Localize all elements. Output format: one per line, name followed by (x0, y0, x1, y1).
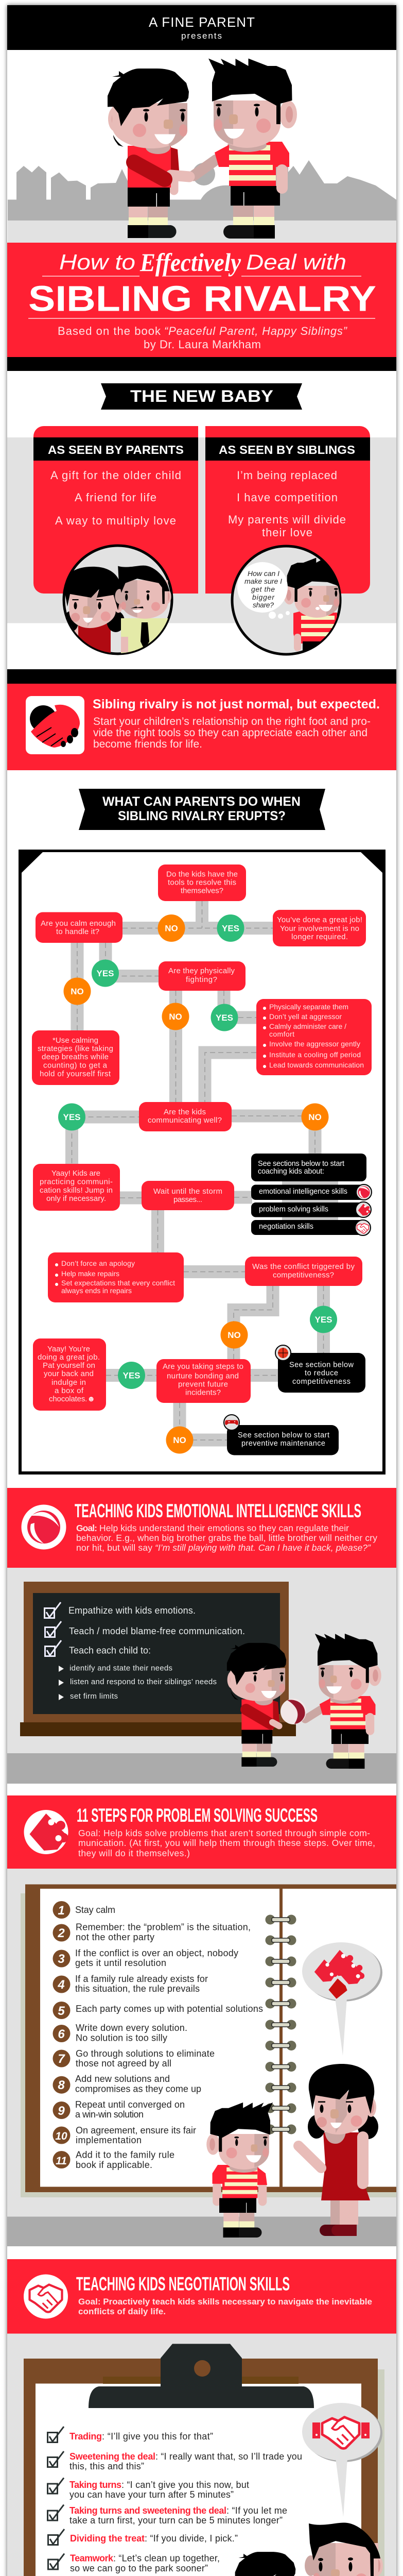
outcome: box of chocolates: your back and (44, 1369, 94, 1378)
section header: emotional intelligence: nor hit, but will say (76, 1543, 152, 1553)
title line one: Effectively (139, 248, 241, 277)
question: communicating well (148, 1108, 222, 1125)
question: nurture bonding (163, 1362, 243, 1397)
step list: implementation (76, 2135, 142, 2145)
negotiation list: Teamwork (70, 2553, 114, 2564)
question: do the kids have the tools (166, 870, 238, 895)
step list: Stay calm (75, 1905, 115, 1915)
step list: No solution is too silly (76, 2033, 167, 2043)
notebook: 11 (56, 2155, 67, 2167)
advice: calming strategies: counting) to get a (43, 1061, 108, 1070)
panel: key message (7, 684, 396, 770)
step list: a win-win solution (75, 2109, 144, 2120)
notebook: 8 (58, 2078, 65, 2092)
step list: not the other party (76, 1932, 154, 1942)
banner: the new baby (101, 383, 302, 410)
thought bubble: bigger (252, 593, 275, 601)
panel: as seen by siblings: My parents will divide (228, 513, 346, 526)
flowchart decision boxes (32, 865, 372, 1411)
notebook: 5 (58, 2004, 65, 2018)
thought bubble: How can I (248, 569, 279, 578)
title line one (59, 248, 346, 277)
advice: calming strategies: hold of yourself first (40, 1070, 111, 1078)
question: are you calm enough (41, 919, 116, 936)
step list: Remember: the “problem” is the situation, (76, 1922, 251, 1932)
notebook: 6 (58, 2027, 65, 2041)
panel: key message: vide the right tools so they can appreciate each other and (93, 727, 367, 739)
panel: key message: Start your children’s relationship on the right foot and pro- (93, 716, 371, 727)
flowchart coaching boxes: coaching kids about: (258, 1167, 324, 1176)
negotiation list: : “If you let me (226, 2505, 287, 2516)
question: competitiveness: Was the conflict triggered by (252, 1262, 355, 1271)
title panel (7, 243, 396, 357)
question: communicating well: communicating well? (148, 1116, 222, 1125)
flowchart yes and no badges: NO (165, 923, 178, 934)
checklist (68, 1605, 245, 1701)
negotiation list (69, 2431, 302, 2576)
section header: negotiation (7, 2259, 396, 2334)
panel: as seen by siblings: AS SEEN BY SIBLINGS (219, 443, 355, 456)
message text: Sibling rivalry is not just normal, but expected. (93, 697, 380, 711)
icon: handshake (24, 2274, 68, 2318)
question: competitiveness: competitiveness? (273, 1270, 334, 1280)
flowchart coaching boxes: preventive maintenance (241, 1439, 325, 1448)
negotiation list: Taking turns and sweetening the deal (69, 2505, 226, 2516)
panel: as seen by parents (33, 426, 198, 594)
subtitle: “Peaceful Parent, Happy Siblings” (164, 325, 348, 337)
icon: beach ball (22, 1504, 66, 1550)
question: physically fighting: Are they physically (168, 967, 235, 975)
flowchart yes and no badges: YES (222, 923, 239, 934)
panel: as seen by parents: A gift for the older child (50, 469, 181, 482)
negotiation list: Dividing the treat (70, 2533, 145, 2544)
flowchart coaching boxes: See section below (289, 1361, 354, 1369)
thought bubble: share? (253, 601, 274, 609)
negotiation list: Trading (69, 2431, 102, 2442)
actions: repairs: Set expectations that every conflict (61, 1279, 175, 1287)
step list: Go through solutions to eliminate (76, 2048, 215, 2059)
advice: calming strategies: deep breaths while (42, 1053, 109, 1061)
negotiation list: take a turn first, your turn can be 5 minutes longer” (69, 2515, 283, 2526)
outcome: practicing communication: practicing communi- (40, 1178, 113, 1187)
panel: as seen by siblings: their love (262, 526, 312, 539)
actions: physical fight: Physically separate them (269, 1003, 348, 1011)
older brother (194, 59, 297, 239)
icon: puzzle piece (24, 1810, 68, 1854)
checklist: Empathize with kids emotions. (68, 1605, 196, 1616)
outcome: great job (277, 916, 362, 941)
portrait: sibling thinking (232, 546, 343, 657)
skyline (8, 155, 396, 221)
characters: younger boy and dad (235, 2523, 383, 2576)
gray band behind comparison (7, 437, 396, 623)
flowchart yes and no badges: NO (169, 1012, 182, 1022)
banner: what can parents do (79, 789, 325, 830)
section header: emotional intelligence: Help kids understand their emotions so they can regulate their (99, 1523, 349, 1533)
step list: On agreement, ensure its fair (76, 2125, 196, 2136)
notebook: 4 (57, 1978, 65, 1992)
panel: as seen by parents: AS SEEN BY PARENTS (48, 443, 184, 456)
advice: wait (153, 1187, 222, 1204)
checklist: Teach each child to: (69, 1646, 151, 1656)
question: nurture bonding: incidents? (185, 1388, 221, 1397)
clipboard (24, 2344, 384, 2576)
actions: physical fight: Lead towards communication (269, 1061, 364, 1069)
flowchart coaching boxes: to reduce (305, 1369, 338, 1378)
step list: If a family rule already exists for (75, 1974, 208, 1984)
notebook: 2 (57, 1926, 65, 1940)
subtitle: Based on the book (58, 325, 161, 337)
actions: repairs: always ends in repairs (61, 1286, 132, 1295)
number badges (52, 1901, 70, 2168)
checklist: listen and respond to their siblings’ needs (70, 1677, 217, 1686)
header bar (7, 5, 396, 50)
notebook: 3 (58, 1952, 65, 1966)
negotiation list: Taking turns (69, 2480, 121, 2490)
thought bubble: make sure I (244, 577, 282, 585)
step list: those not agreed by all (76, 2058, 171, 2069)
panel: as seen by siblings: I have competition (237, 491, 338, 504)
thought bubble: get the (251, 585, 275, 594)
step list: this situation, the rule prevails (75, 1984, 200, 1994)
notebook: 7 (58, 2052, 65, 2066)
step list: Add new solutions and (75, 2074, 170, 2084)
advice: calming strategies: *Use calming (52, 1036, 98, 1045)
thought bubble (237, 562, 290, 619)
flowchart coaching boxes: competitiveness (292, 1378, 351, 1386)
flowchart yes and no badges: YES (63, 1112, 81, 1122)
banner: what can parents do: SIBLING RIVALRY ERUPTS? (118, 809, 286, 823)
notebook: 1 (58, 1904, 65, 1918)
checklist: identify and state their needs (69, 1664, 172, 1672)
icon badges (224, 1184, 372, 1430)
checklist: set firm limits (70, 1692, 118, 1701)
outcome: practicing communication: Yaay! Kids are (51, 1169, 100, 1178)
flowchart coaching boxes: emotional intelligence skills (259, 1188, 347, 1196)
question: competitiveness (252, 1262, 355, 1280)
flowchart yes and no badges: YES (96, 969, 114, 978)
flowchart yes and no badges: YES (314, 1315, 332, 1325)
step list (75, 1905, 263, 2170)
question: do the kids have the tools: tools to resolve this (168, 878, 236, 887)
title line one: How to (59, 250, 135, 274)
speech bubble: puzzle (302, 1942, 382, 2056)
advice: wait: Wait until the storm (153, 1187, 222, 1196)
outcome: practicing communication: cation skills! Jump in (40, 1186, 113, 1195)
step list: book if applicable. (76, 2160, 152, 2170)
advice: calming strategies: strategies (like taking (38, 1044, 113, 1053)
actions: physical fight (263, 1003, 364, 1069)
flowchart yes and no badges: NO (308, 1112, 322, 1122)
question: nurture bonding: nurture bonding and (167, 1371, 239, 1381)
section header: problem solving: they will do it themselves.) (78, 1848, 190, 1858)
hero illustration: two brothers shaking hands (8, 59, 396, 243)
title panel: by Dr. Laura Markham (144, 338, 261, 351)
flowchart coaching boxes: negotiation skills (259, 1223, 313, 1231)
characters: boy and mom (206, 2064, 378, 2238)
question: are you calm enough: to handle it? (56, 927, 99, 936)
actions: physical fight: comfort (269, 1030, 294, 1038)
question: do the kids have the tools: Do the kids have the (166, 870, 238, 879)
outcome: box of chocolates: Yaay! You’re (47, 1345, 90, 1353)
outcome: box of chocolates (38, 1345, 100, 1403)
flowchart yes and no badges: NO (173, 1435, 186, 1445)
question: nurture bonding: prevent future (178, 1380, 228, 1389)
flowchart yes and no badges (58, 914, 337, 1454)
clipboard clip (89, 2344, 314, 2408)
flowchart yes and no badges: NO (71, 987, 84, 996)
step list: If the conflict is over an object, nobody (75, 1948, 238, 1958)
section header: emotional intelligence: Goal: (76, 1523, 97, 1533)
section header: emotional intelligence (7, 1488, 396, 1568)
ball (281, 1699, 306, 1724)
actions: physical fight: Institute a cooling off period (269, 1050, 361, 1059)
younger brother (108, 69, 189, 238)
banner: what can parents do: WHAT CAN PARENTS DO WHEN (102, 794, 301, 809)
notebook (21, 1885, 396, 2197)
actions: repairs (55, 1259, 175, 1295)
notebook: 9 (58, 2104, 65, 2118)
title line one: Deal with (246, 250, 346, 274)
section header: emotional intelligence: “I’m still playing with that. Can I have it back, please?” (155, 1543, 371, 1553)
negotiation list: this, this and this” (69, 2461, 144, 2471)
portrait: parents (63, 546, 172, 657)
outcome: great job: You’ve done a great job! (277, 916, 362, 924)
advice: calming strategies (38, 1036, 113, 1078)
speech bubble: handshake (302, 2403, 382, 2517)
main title: SIBLING RIVALRY (28, 278, 376, 318)
characters: brothers and ball (227, 1634, 381, 1769)
question: physically fighting (168, 967, 235, 984)
outcome: great job: Your involvement is no (280, 924, 359, 933)
question: are you calm enough: Are you calm enough (41, 919, 116, 928)
section header: problem solving: Goal: Help kids solve problems that aren’t sorted through simple com- (78, 1828, 370, 1838)
actions: repairs: Don’t force an apology (61, 1259, 135, 1267)
question: physically fighting: fighting? (186, 975, 217, 984)
section header: problem solving (7, 1795, 396, 1869)
question: communicating well: Are the kids (164, 1108, 206, 1116)
question: do the kids have the tools: themselves? (181, 887, 223, 895)
flowchart coaching boxes: See sections below to start (258, 1160, 344, 1168)
flowchart yes and no badges: YES (122, 1370, 141, 1381)
outcome: practicing communication (40, 1169, 113, 1203)
panel: as seen by siblings: I’m being replaced (237, 469, 337, 482)
step list: Add it to the family rule (76, 2149, 174, 2160)
step list: Write down every solution. (76, 2023, 187, 2033)
step list: gets it until resolution (75, 1958, 166, 1968)
outcome: box of chocolates: doing a great job. (38, 1353, 100, 1362)
negotiation list: : “Let’s clean up together, (113, 2553, 220, 2564)
negotiation list: so we can go to the park sooner” (70, 2563, 208, 2573)
panel: key message: become friends for life. (93, 738, 202, 750)
section header: negotiation: conflicts of daily life. (78, 2307, 166, 2316)
outcome: box of chocolates: Pat yourself on (43, 1361, 95, 1370)
negotiation list: : “I really want that, so I’ll trade you (155, 2451, 302, 2462)
actions: physical fight: Calmly administer care / (269, 1022, 346, 1030)
checklist: Teach / model blame-free communication. (69, 1626, 245, 1636)
flowchart coaching boxes: problem solving skills (259, 1206, 328, 1214)
flowchart coaching boxes: See section below to start (238, 1431, 329, 1439)
negotiation list: Sweetening the deal (69, 2451, 155, 2462)
brand name: A FINE PARENT (149, 14, 255, 30)
notebook: 10 (55, 2130, 67, 2142)
outcome: box of chocolates: chocolates.☻ (49, 1395, 95, 1403)
step list: Each party comes up with potential solutions (76, 2004, 263, 2014)
negotiation list: you can have your turn after 5 minutes” (69, 2489, 234, 2500)
flowchart frame (19, 850, 386, 1475)
flowchart yes and no badges: YES (216, 1013, 233, 1023)
outcome: box of chocolates: a box of (55, 1386, 84, 1395)
panel: as seen by parents: A way to multiply love (55, 514, 176, 527)
outcome: great job: longer required. (291, 933, 348, 941)
notebook rings (266, 1914, 296, 2134)
panel: as seen by parents: A friend for life (75, 491, 156, 504)
actions: physical fight: Don’t yell at aggressor (269, 1012, 342, 1021)
negotiation list: : “I can’t give you this now, but (121, 2480, 249, 2490)
flowchart yes and no badges: NO (227, 1330, 241, 1340)
section header: problem solving: munication. (At first, you will help them through these steps. Over time, (78, 1838, 375, 1848)
step list: compromises as they come up (75, 2084, 201, 2094)
step list: Repeat until converged on (75, 2099, 185, 2110)
flowchart coaching boxes (224, 1154, 372, 1455)
presents: presents (181, 31, 222, 41)
section header: negotiation: Goal: Proactively teach kids skills necessary to navigate the inevitable (78, 2297, 372, 2307)
icon: clasped hands (26, 696, 84, 754)
banner: the new baby: THE NEW BABY (130, 387, 273, 405)
section header: emotional intelligence: behavior. E.g., when big brother grabs the ball, little brother will neither cry (76, 1533, 377, 1543)
advice: wait: passes... (173, 1195, 202, 1204)
actions: repairs: Help make repairs (61, 1269, 119, 1278)
actions: physical fight: Involve the aggressor gently (269, 1040, 360, 1048)
outcome: practicing communication: only if necessary. (46, 1194, 106, 1203)
outcome: box of chocolates: indulge in (51, 1378, 86, 1387)
question: nurture bonding: Are you taking steps to (163, 1362, 243, 1371)
flowchart connector roads (72, 901, 338, 1440)
negotiation list: : “I’ll give you this for that” (102, 2431, 213, 2442)
chalkboard (20, 1582, 296, 1736)
panel: as seen by siblings (205, 426, 370, 594)
negotiation list: : “If you divide, I pick.” (145, 2533, 238, 2544)
